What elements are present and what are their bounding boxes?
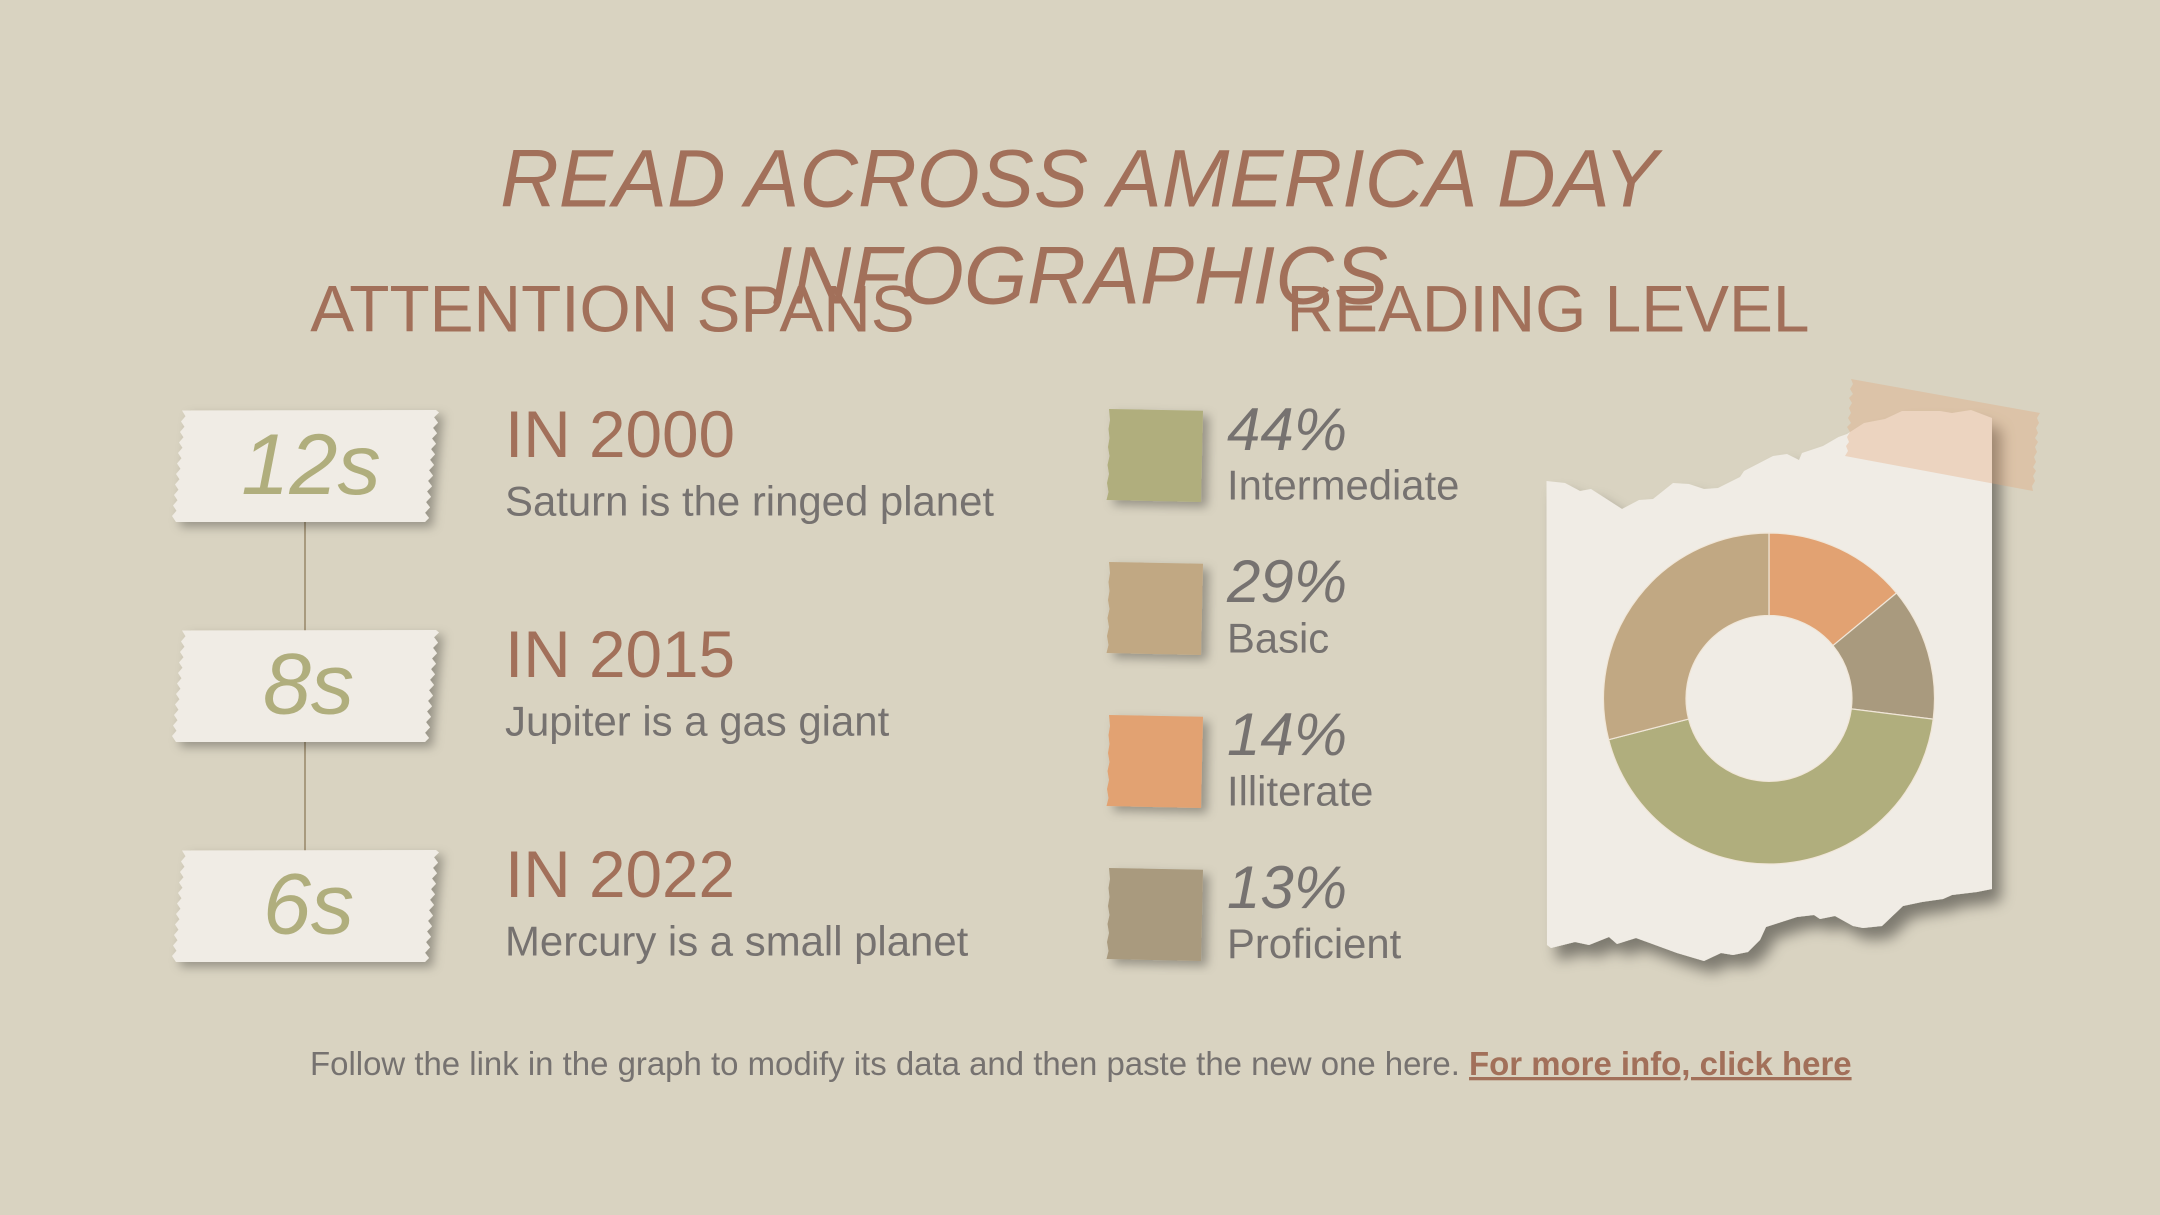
legend text: basic: 29% — [1226, 548, 1347, 615]
legend text: intermediate: 44% — [1227, 396, 1347, 463]
legend text: basic — [1226, 548, 1347, 662]
legend text: basic: Basic — [1227, 614, 1329, 662]
legend text: illiterate — [1227, 701, 1373, 814]
panel: tag 12s: 12s — [241, 417, 381, 513]
connector line top — [304, 522, 306, 632]
legend swatch: basic — [1106, 562, 1203, 655]
washi tape — [1845, 379, 2040, 491]
text block: 2000: Saturn is the ringed planet — [505, 478, 994, 524]
text block: 2022: Mercury is a small planet — [505, 918, 969, 964]
text block: 2015 — [505, 618, 890, 744]
panel: tag 8s: 8s — [263, 636, 354, 732]
legend text: proficient: Proficient — [1227, 920, 1402, 967]
slice: intermediate 44% — [1609, 709, 1933, 864]
footer text: Follow the link in the graph to modify its data and then paste the new one here. For more info, click here — [310, 1045, 1852, 1082]
text block: 2000: IN 2000 — [505, 398, 735, 471]
panel: tag 6s: 6s — [263, 856, 354, 952]
connector line bottom — [304, 742, 306, 852]
legend swatch: illiterate — [1106, 715, 1203, 808]
title: READ ACROSS AMERICA DAY — [500, 134, 1664, 224]
heading: attention spans: ATTENTION SPANS — [310, 272, 915, 346]
panel: tag 8s — [172, 630, 439, 742]
text block: 2015: Jupiter is a gas giant — [505, 698, 890, 744]
heading: reading level: READING LEVEL — [1287, 272, 1809, 346]
slice: basic 29% — [1603, 533, 1769, 740]
panel: torn paper — [1546, 410, 1992, 961]
slice: proficient 13% — [1833, 593, 1934, 719]
text block: 2000 — [505, 398, 994, 524]
legend text: illiterate: Illiterate — [1227, 768, 1373, 814]
slice: illiterate 14% — [1769, 533, 1896, 646]
panel: tag 6s — [172, 850, 439, 962]
text block: 2015: IN 2015 — [505, 618, 735, 691]
legend swatch: intermediate — [1106, 409, 1203, 502]
legend text: proficient: 13% — [1227, 854, 1347, 921]
panel: tag 12s — [172, 410, 439, 522]
donut chart — [1603, 533, 1934, 864]
text block: 2022: IN 2022 — [505, 838, 735, 911]
legend text: illiterate: 14% — [1227, 701, 1347, 768]
legend text: intermediate — [1227, 396, 1459, 508]
text block: 2022 — [505, 838, 969, 964]
title: INFOGRAPHICS — [770, 232, 1388, 322]
legend swatch: proficient — [1106, 868, 1203, 961]
legend text: proficient — [1227, 854, 1402, 967]
legend text: intermediate: Intermediate — [1227, 462, 1459, 508]
